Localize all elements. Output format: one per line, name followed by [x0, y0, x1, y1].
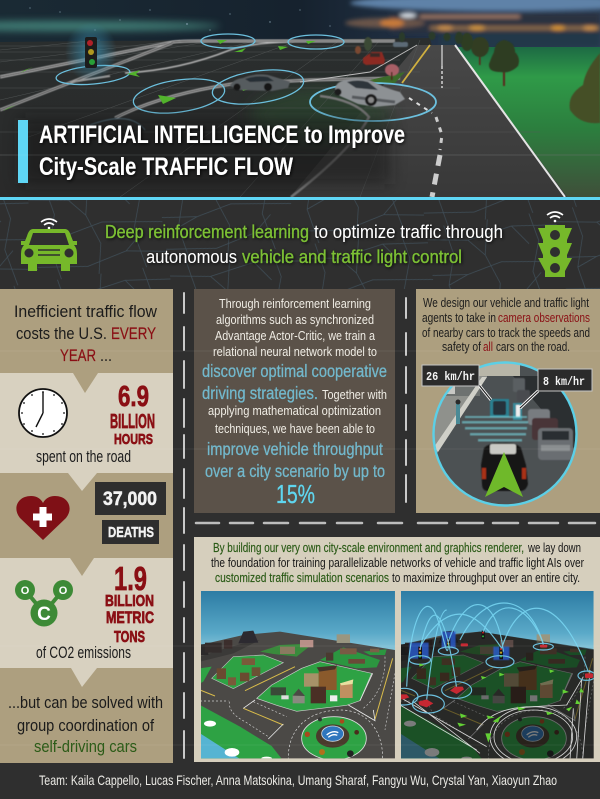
- costs heading: ...: [100, 347, 112, 365]
- icon: heart with cross: [16, 496, 70, 540]
- panel: reinforcement learning method: applying mathematical optimization: [208, 403, 381, 418]
- panel: reinforcement learning method: driving strategies.: [202, 383, 318, 403]
- stat: 1.9 billion metric tons: TONS: [114, 629, 145, 646]
- camera view circle: [422, 360, 592, 510]
- green flow arrows: [419, 663, 584, 743]
- stat: 1.9 billion metric tons: METRIC: [106, 609, 154, 627]
- panel: reinforcement learning method: techniques, we have been able to: [215, 421, 375, 436]
- panel: reinforcement learning method: over a city scenario by up to: [205, 461, 385, 481]
- road markings: [300, 45, 565, 197]
- closing statement: ...but can be solved with: [8, 694, 163, 712]
- stat: 6.9 billion hours: [36, 381, 155, 466]
- road lane dashes: [184, 293, 595, 758]
- icon: CO2 molecule: [15, 580, 73, 626]
- closing statement: group coordination of: [17, 717, 154, 735]
- title: City-Scale TRAFFIC FLOW: [39, 153, 293, 181]
- icon: clock: [19, 389, 67, 437]
- closing statement: [8, 694, 163, 756]
- stat: 1.9 billion metric tons: 1.9: [114, 560, 147, 597]
- stat: 1.9 billion metric tons: of CO2 emissions: [36, 644, 131, 662]
- title accent bar: [18, 120, 28, 183]
- header divider: [0, 197, 600, 200]
- speed label: 26 km/hr: 26 km/hr: [426, 371, 475, 384]
- subtitle: Deep reinforcement learning: [105, 222, 309, 242]
- panel: simulation environment: customized traffic simulation scenarios: [215, 571, 389, 585]
- roadside trees: [355, 32, 600, 123]
- closing statement: self-driving cars: [34, 738, 137, 756]
- virtual lanes: [0, 41, 400, 197]
- city render: connected vehicles and lights: [401, 591, 594, 758]
- speed label: 8 km/hr: [520, 369, 592, 408]
- panel: simulation environment: [194, 537, 600, 767]
- panel: costs of inefficient traffic: [0, 289, 173, 763]
- stat: 6.9 billion hours: 6.9: [118, 381, 149, 413]
- icon: green heading arrow: [485, 452, 523, 497]
- panel: camera observations: safety of: [442, 340, 481, 354]
- icon: CO2 molecule: O: [59, 585, 68, 597]
- stat: 37,000 deaths: 37,000: [103, 489, 157, 510]
- panel: reinforcement learning method: algorithms such as synchronized: [216, 312, 374, 327]
- detection circles: [55, 34, 436, 121]
- green flow arrows: [3, 40, 316, 111]
- subtitle: [105, 222, 503, 267]
- panel: reinforcement learning method: improve vehicle throughput: [207, 439, 383, 459]
- red SUV: [363, 42, 408, 65]
- traffic light: [67, 26, 115, 78]
- panel: reinforcement learning method: 15%: [276, 479, 315, 509]
- panel: reinforcement learning method: Advantage Actor-Critic, we train a: [215, 328, 376, 343]
- header illustration: road scene: [0, 0, 600, 197]
- icon: CO2 molecule: C: [37, 604, 51, 625]
- panel: camera observations: agents to take in: [422, 311, 496, 325]
- stat: 1.9 billion metric tons: BILLION: [105, 593, 154, 610]
- panel: reinforcement learning method: [194, 289, 395, 513]
- panel: reinforcement learning method: Through reinforcement learning: [219, 296, 371, 311]
- title shadow: [20, 118, 390, 184]
- icon: connected car: [21, 219, 77, 271]
- title: [39, 121, 405, 181]
- panel: simulation environment: we lay down: [527, 541, 581, 555]
- panel: reinforcement learning method: discover optimal cooperative: [202, 361, 387, 381]
- panel: simulation environment: By building our very own city-scale environment and graphics renderer,: [213, 541, 524, 555]
- sunset horizon lights: [345, 0, 600, 47]
- traffic signals: [418, 631, 503, 659]
- panel: reinforcement learning method: relational neural network model to: [213, 344, 377, 359]
- speed label: 8 km/hr: 8 km/hr: [543, 376, 585, 389]
- panel: camera observations: cars on the road.: [496, 340, 570, 354]
- subtitle: to optimize traffic through: [314, 222, 503, 242]
- communication arcs: [407, 603, 588, 700]
- panel: camera observations: all: [483, 340, 493, 354]
- perspective grid: [0, 40, 600, 197]
- subtitle: vehicle and traffic light control: [242, 247, 462, 267]
- silver car: [334, 79, 405, 107]
- costs heading: [14, 303, 157, 365]
- speed label: 26 km/hr: [422, 365, 491, 400]
- stat: 6.9 billion hours: spent on the road: [36, 448, 131, 466]
- icon: connected traffic light: [538, 212, 572, 277]
- stat: 37,000 deaths: DEATHS: [108, 524, 154, 541]
- costs heading: Inefficient traffic flow: [14, 303, 157, 321]
- stat: 37,000 deaths: [95, 482, 166, 544]
- city render: base scene: [200, 591, 395, 760]
- stat: 1.9 billion metric tons: [36, 560, 154, 662]
- panel: reinforcement learning method: Together with: [322, 387, 387, 402]
- title: ARTIFICIAL INTELLIGENCE to Improve: [39, 121, 405, 149]
- costs heading: costs the U.S.: [16, 325, 107, 343]
- subtitle band with city map texture: [0, 200, 600, 289]
- stat: 6.9 billion hours: HOURS: [114, 431, 153, 448]
- stat: 6.9 billion hours: BILLION: [110, 411, 155, 433]
- dark sedan: [230, 74, 290, 91]
- costs heading: YEAR: [60, 347, 96, 365]
- costs heading: EVERY: [111, 325, 156, 343]
- sensing rings and red cars: [390, 643, 595, 713]
- icon: CO2 molecule: O: [21, 585, 30, 597]
- panel: camera observations: [416, 289, 600, 513]
- subtitle: autonomous: [146, 247, 237, 267]
